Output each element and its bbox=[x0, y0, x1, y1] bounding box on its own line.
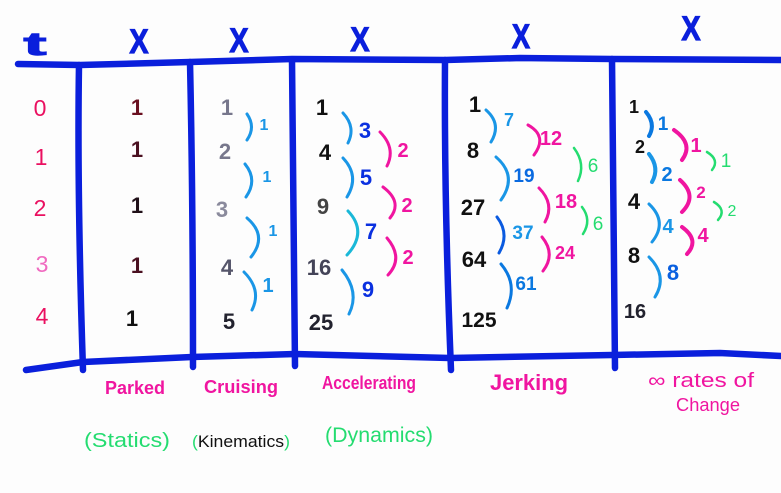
column: accelerating bbox=[307, 95, 414, 335]
label: infinite rates of change: ∞ rates of bbox=[648, 370, 755, 392]
column: accelerating: 3 bbox=[359, 118, 371, 143]
label: infinite rates of change: Change bbox=[676, 395, 740, 415]
column: cruising: 5 bbox=[223, 309, 235, 334]
column: cruising: 1 bbox=[263, 169, 272, 186]
column: parked: 1 bbox=[131, 95, 143, 120]
column: cruising: 4 bbox=[221, 255, 234, 280]
column: accelerating: 9 bbox=[317, 194, 329, 219]
table grid bbox=[18, 58, 781, 370]
column: parked: 1 bbox=[131, 137, 143, 162]
column: infinite rates of change: 2 bbox=[696, 183, 706, 202]
column: cruising: 1 bbox=[260, 117, 269, 134]
column: parked: 1 bbox=[131, 193, 143, 218]
column headers: X bbox=[130, 23, 149, 61]
column: cruising: 1 bbox=[269, 223, 278, 240]
column: accelerating: 1 bbox=[316, 95, 328, 120]
column: jerking: 8 bbox=[467, 138, 479, 163]
column: accelerating: 9 bbox=[362, 277, 374, 302]
column: parked: 1 bbox=[131, 253, 143, 278]
column: jerking: 12 bbox=[540, 128, 562, 150]
column: jerking: 7 bbox=[504, 110, 514, 130]
label: Cruising: Cruising bbox=[204, 377, 278, 397]
label: Dynamics: (Dynamics) bbox=[325, 424, 433, 447]
column: infinite rates of change: 4 bbox=[628, 189, 641, 214]
column: accelerating: 25 bbox=[309, 310, 333, 335]
column: infinite rates of change: 1 bbox=[721, 151, 731, 172]
column: jerking: 64 bbox=[462, 247, 487, 272]
label: Accelerating: Accelerating bbox=[322, 373, 416, 393]
column: jerking: 19 bbox=[513, 166, 535, 187]
column headers: t bbox=[24, 26, 47, 62]
column: accelerating: 2 bbox=[397, 140, 409, 162]
column: t values bbox=[34, 95, 49, 329]
column: infinite rates of change: 2 bbox=[728, 203, 737, 220]
column: jerking: 37 bbox=[512, 223, 534, 244]
column: accelerating: 7 bbox=[365, 219, 377, 244]
column headers: X bbox=[350, 21, 370, 59]
label: Jerking: Jerking bbox=[490, 370, 568, 395]
label: Kinematics: (Kinematics) bbox=[192, 432, 290, 451]
column: jerking: 6 bbox=[593, 214, 603, 235]
column: t values: 4 bbox=[36, 303, 49, 329]
column headers: X bbox=[682, 10, 701, 48]
column: infinite rates of change: 1 bbox=[658, 114, 669, 135]
column: cruising bbox=[216, 95, 278, 334]
column: parked bbox=[126, 95, 143, 331]
column: accelerating: 4 bbox=[319, 140, 332, 165]
column: jerking: 27 bbox=[461, 195, 485, 220]
label: Statics: (Statics) bbox=[84, 430, 170, 452]
column: infinite rates of change: 4 bbox=[697, 225, 709, 247]
column: accelerating: 2 bbox=[401, 195, 413, 217]
column: infinite rates of change: 1 bbox=[690, 135, 702, 157]
column: jerking: 18 bbox=[555, 191, 577, 213]
label: infinite rates of change bbox=[648, 370, 755, 415]
column: infinite rates of change: 4 bbox=[662, 216, 674, 238]
column: infinite rates of change: 2 bbox=[661, 164, 673, 186]
column: infinite rates of change: 8 bbox=[628, 243, 640, 268]
column: accelerating: 2 bbox=[402, 247, 414, 269]
column: jerking: 24 bbox=[555, 243, 575, 263]
column: infinite rates of change bbox=[624, 97, 737, 323]
column headers: X bbox=[512, 18, 530, 56]
column: t values: 1 bbox=[35, 144, 47, 170]
column: infinite rates of change: 8 bbox=[667, 260, 679, 285]
column: infinite rates of change: 1 bbox=[629, 97, 639, 117]
column: jerking: 125 bbox=[461, 309, 497, 332]
column: cruising: 1 bbox=[221, 95, 233, 120]
column: accelerating: 16 bbox=[307, 255, 331, 280]
column: t values: 3 bbox=[36, 251, 48, 277]
column: accelerating: 5 bbox=[360, 165, 372, 190]
column: t values: 0 bbox=[34, 95, 46, 121]
column: infinite rates of change: 16 bbox=[624, 301, 646, 323]
label: Parked: Parked bbox=[105, 378, 165, 398]
column: cruising: 2 bbox=[219, 139, 231, 164]
column: infinite rates of change: 2 bbox=[635, 137, 645, 157]
column: jerking: 61 bbox=[515, 274, 537, 295]
column: cruising: 3 bbox=[216, 197, 228, 222]
column: parked: 1 bbox=[126, 306, 138, 331]
column: jerking bbox=[461, 92, 603, 332]
column: t values: 2 bbox=[34, 195, 46, 221]
column headers: X bbox=[230, 22, 249, 60]
column: jerking: 6 bbox=[588, 156, 598, 177]
column headers bbox=[24, 10, 701, 62]
column: cruising: 1 bbox=[262, 275, 274, 297]
column: jerking: 1 bbox=[469, 92, 481, 117]
